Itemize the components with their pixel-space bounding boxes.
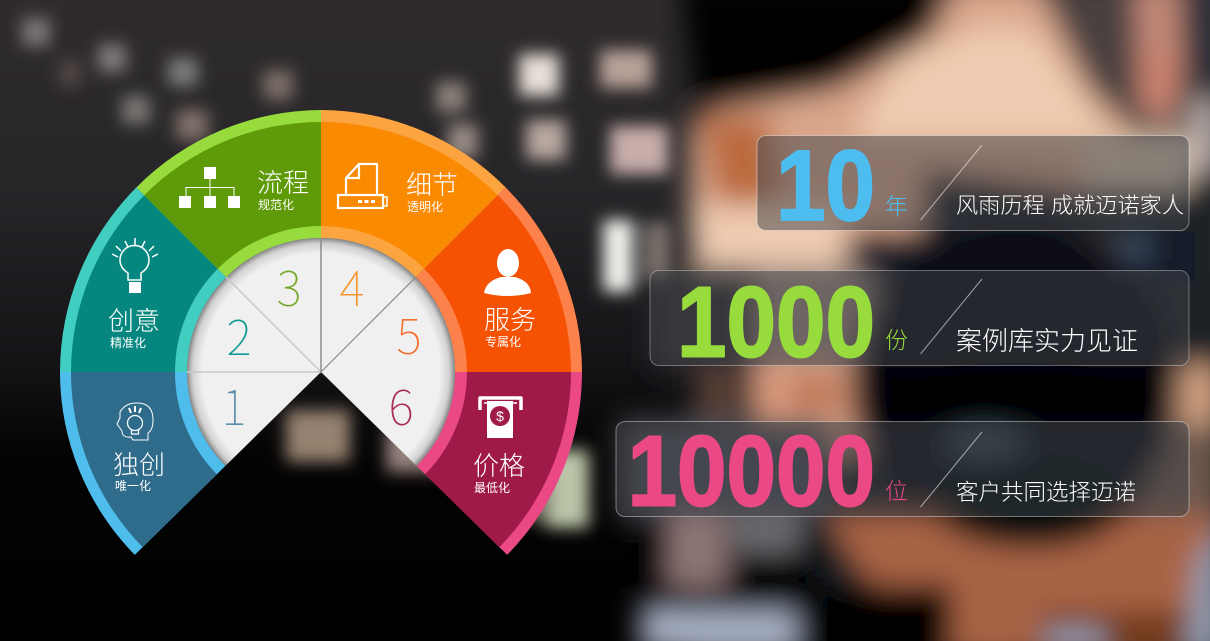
stat panel: 1000 份	[650, 267, 1189, 379]
icon: org chart	[179, 167, 240, 208]
sector 3: 流程 规范化: 流程	[257, 168, 309, 198]
icon: banknote slot	[480, 398, 521, 438]
number 3: 3	[276, 250, 302, 320]
icon: printer	[338, 164, 387, 208]
sector 6: 价格 最低化: 价格	[473, 451, 525, 481]
icon: banknote slot: $	[496, 408, 504, 424]
stat panel: 10000 位: 位	[885, 478, 908, 504]
sector 6: 价格 最低化: 最低化	[474, 481, 510, 495]
icon: head with light bulb	[117, 403, 153, 440]
sector 4: 细节 透明化: 透明化	[407, 200, 443, 214]
number 4: 4	[339, 250, 365, 320]
sector 1: 独创 唯一化: 独创	[113, 450, 165, 480]
stat panel: 10 年: 风雨历程 成就迈诺家人	[956, 193, 1184, 218]
number 1: 1	[221, 369, 247, 439]
radial sector chart	[60, 110, 582, 555]
sector 1: 独创 唯一化: 唯一化	[115, 479, 151, 493]
sector 1: 独创 唯一化	[60, 372, 225, 555]
stat panel: 1000 份: 案例库实力见证	[956, 326, 1138, 356]
sector 3: 流程 规范化: 规范化	[258, 197, 294, 212]
sector 4: 细节 透明化: 细节	[406, 170, 458, 200]
icon: person	[484, 249, 531, 296]
inner white fan	[187, 238, 455, 466]
sector 5: 服务 专属化: 服务	[484, 305, 536, 335]
icon: light bulb	[112, 238, 158, 293]
stat panel: 10000 位: 客户共同选择迈诺	[956, 480, 1136, 505]
sector 2: 创意 精准化: 精准化	[110, 336, 146, 350]
number 5: 5	[396, 298, 422, 368]
sector 5: 服务 专属化: 专属化	[485, 334, 521, 349]
sector 3: 流程 规范化	[136, 110, 321, 277]
sector 4: 细节 透明化	[321, 110, 506, 277]
number 6: 6	[388, 369, 414, 439]
stat panel: 10 年: 年	[885, 193, 908, 219]
stat panel: 1000 份: 1000	[677, 267, 875, 379]
stat panel: 10 年	[757, 130, 1189, 242]
stat panel: 10000 位	[616, 416, 1189, 528]
sector 6: 价格 最低化	[417, 372, 582, 555]
number 2: 2	[226, 299, 252, 369]
stat panel: 10 年: 10	[776, 130, 875, 242]
sector 2: 创意 精准化	[60, 187, 226, 372]
stat panel: 1000 份: 份	[885, 327, 908, 353]
stat panel: 10000 位: 10000	[628, 416, 875, 528]
sector 5: 服务 专属化	[416, 187, 582, 372]
sector 2: 创意 精准化: 创意	[108, 306, 160, 336]
